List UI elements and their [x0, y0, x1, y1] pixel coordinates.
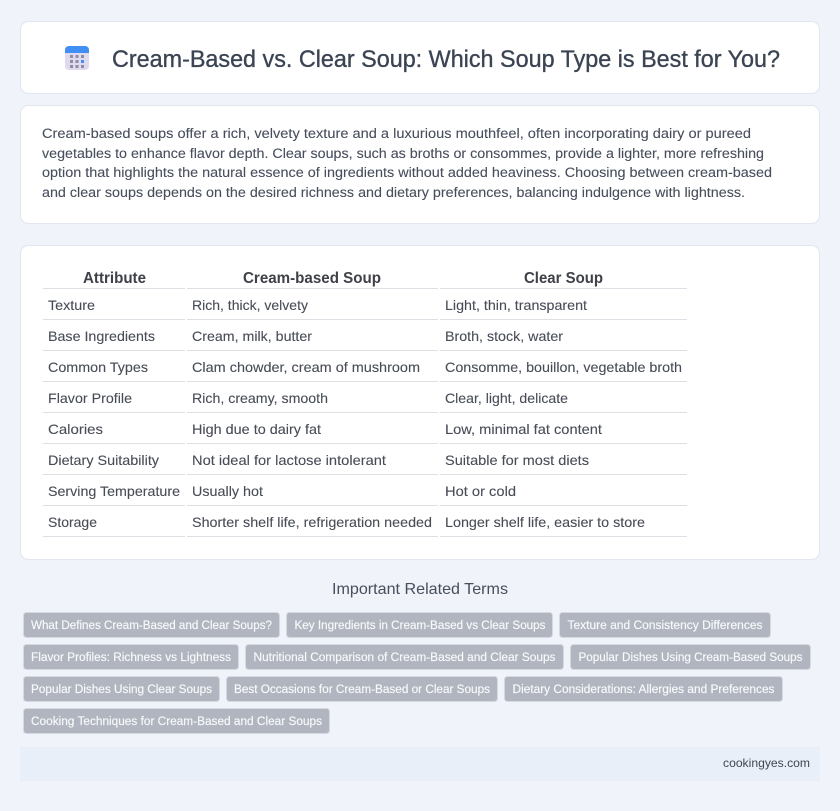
footer: [20, 747, 820, 781]
table header: Attribute: [83, 270, 146, 287]
row: calories: [48, 421, 602, 437]
tag: What Defines Cream-Based and Clear Soups?: [31, 618, 272, 632]
table header: Clear Soup: [524, 270, 603, 287]
tag: [286, 612, 552, 638]
tag: Best Occasions for Cream-Based or Clear Soups: [234, 682, 490, 696]
row: base ingredients: Cream, milk, butter: [192, 328, 312, 344]
tag: Flavor Profiles: Richness vs Lightness: [31, 650, 231, 664]
title: Cream-Based vs. Clear Soup: Which Soup Type is Best for You?: [112, 46, 780, 73]
row: serving temperature: Hot or cold: [445, 483, 516, 499]
row: flavor profile: [48, 390, 568, 406]
row: common types: Common Types: [48, 359, 148, 375]
table header: [83, 270, 603, 287]
intro paragraph: Cream-based soups offer a rich, velvety texture and a luxurious mouthfeel, often incorporating dairy or pureed: [42, 126, 751, 142]
tag: [226, 676, 498, 702]
table header: Cream-based Soup: [243, 270, 381, 287]
row: serving temperature: Usually hot: [192, 483, 263, 499]
row: base ingredients: Base Ingredients: [48, 328, 155, 344]
row: storage: Shorter shelf life, refrigeration needed: [192, 514, 432, 530]
row: base ingredients: [48, 328, 563, 344]
heading: important related terms: Important Related Terms: [332, 581, 508, 598]
row: common types: Clam chowder, cream of mushroom: [192, 359, 420, 375]
row: dietary suitability: [48, 452, 589, 468]
intro paragraph: [42, 126, 772, 201]
row: calories: Calories: [48, 421, 103, 437]
row: common types: Consomme, bouillon, vegetable broth: [445, 359, 682, 375]
tag: [560, 612, 770, 638]
tag: [24, 612, 280, 638]
tag: Popular Dishes Using Clear Soups: [31, 682, 212, 696]
header panel: [20, 22, 820, 94]
row: texture: Light, thin, transparent: [445, 297, 587, 313]
row: texture: Texture: [48, 297, 95, 313]
footer source text: cookingyes.com: [723, 756, 810, 770]
related terms tags: [24, 612, 810, 734]
row: dietary suitability: Suitable for most diets: [445, 452, 589, 468]
intro paragraph: and clear soups depends on the desired richness and dietary preferences, balancing indulgence with lightness.: [42, 185, 745, 201]
row: dietary suitability: Dietary Suitability: [48, 452, 159, 468]
panel: introduction: [20, 106, 820, 224]
row: storage: Storage: [48, 514, 97, 530]
row: flavor profile: Flavor Profile: [48, 390, 132, 406]
tag: [24, 676, 220, 702]
tag: Popular Dishes Using Cream-Based Soups: [578, 650, 802, 664]
tag: Key Ingredients in Cream-Based vs Clear Soups: [294, 618, 546, 632]
tag: [24, 644, 238, 670]
row: texture: [48, 297, 587, 313]
tag: [504, 676, 782, 702]
row: calories: Low, minimal fat content: [445, 421, 602, 437]
panel: comparison table: [20, 246, 820, 560]
row: base ingredients: Broth, stock, water: [445, 328, 563, 344]
tag: Texture and Consistency Differences: [568, 618, 762, 632]
row: common types: [48, 359, 682, 375]
row: serving temperature: [48, 483, 516, 499]
tag: [570, 644, 810, 670]
row: serving temperature: Serving Temperature: [48, 483, 180, 499]
icon: calendar grid: [65, 46, 89, 70]
row: calories: High due to dairy fat: [192, 421, 321, 437]
row: storage: Longer shelf life, easier to store: [445, 514, 645, 530]
row: dietary suitability: Not ideal for lactose intolerant: [192, 452, 386, 468]
tag: Dietary Considerations: Allergies and Preferences: [512, 682, 774, 696]
tag: [246, 644, 564, 670]
row: storage: [48, 514, 645, 530]
tag: [24, 708, 330, 734]
tag: Cooking Techniques for Cream-Based and Clear Soups: [31, 714, 322, 728]
row: flavor profile: Rich, creamy, smooth: [192, 390, 328, 406]
row: texture: Rich, thick, velvety: [192, 297, 308, 313]
tag: Nutritional Comparison of Cream-Based and Clear Soups: [254, 650, 556, 664]
intro paragraph: vegetables to enhance flavor depth. Clear soups, such as broths or consommes, provide a lighter, more refreshing: [42, 146, 764, 162]
row: flavor profile: Clear, light, delicate: [445, 390, 568, 406]
intro paragraph: option that highlights the natural essence of ingredients without added heaviness. Choosing between cream-based: [42, 165, 772, 181]
